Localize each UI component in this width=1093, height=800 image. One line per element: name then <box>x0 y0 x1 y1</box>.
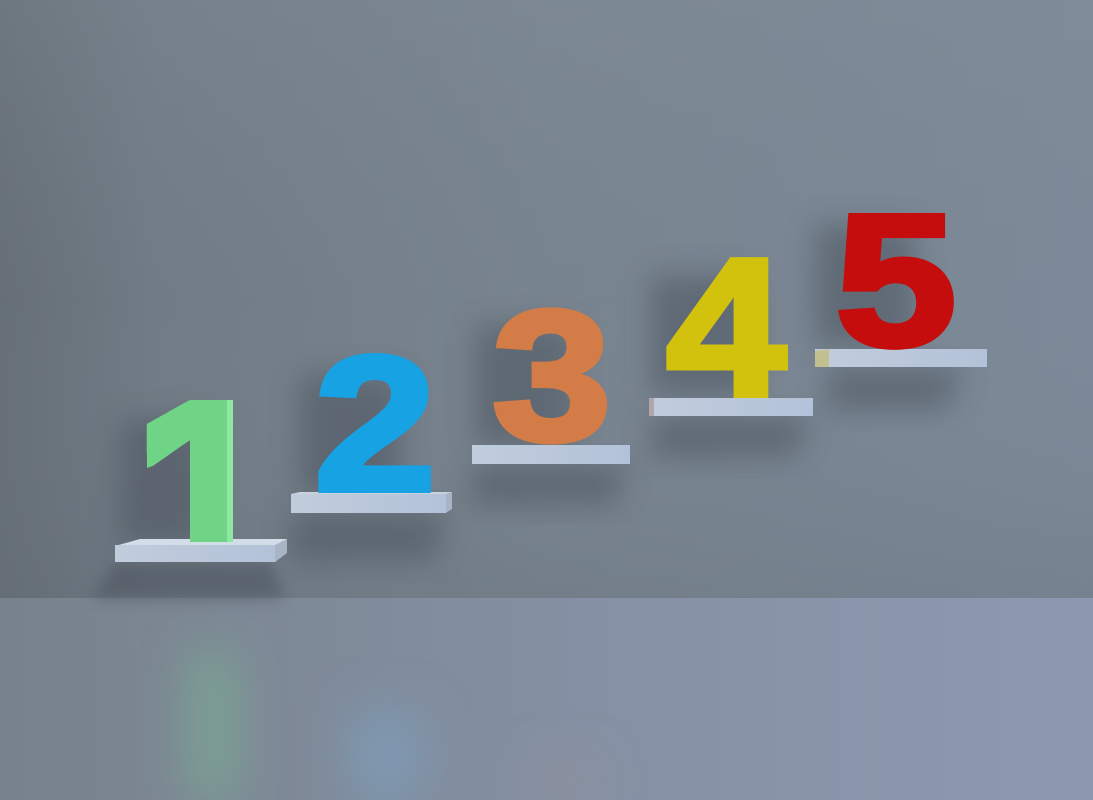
number 3: 3 <box>492 274 611 480</box>
number 2: 2 <box>314 316 436 531</box>
shelf 3 <box>472 445 630 464</box>
shelf 4 <box>649 398 813 416</box>
number 1: 1 <box>136 363 261 580</box>
wall background <box>0 0 1093 600</box>
number 1 <box>146 400 233 542</box>
number 5: 5 <box>835 175 956 385</box>
shelf 1 <box>115 539 287 562</box>
shelf 2 <box>291 492 452 513</box>
wall shadows <box>92 225 965 599</box>
number 4: 4 <box>666 218 786 437</box>
floor reflections <box>190 650 595 800</box>
shelf 5 <box>815 349 987 367</box>
floor <box>0 598 1093 800</box>
